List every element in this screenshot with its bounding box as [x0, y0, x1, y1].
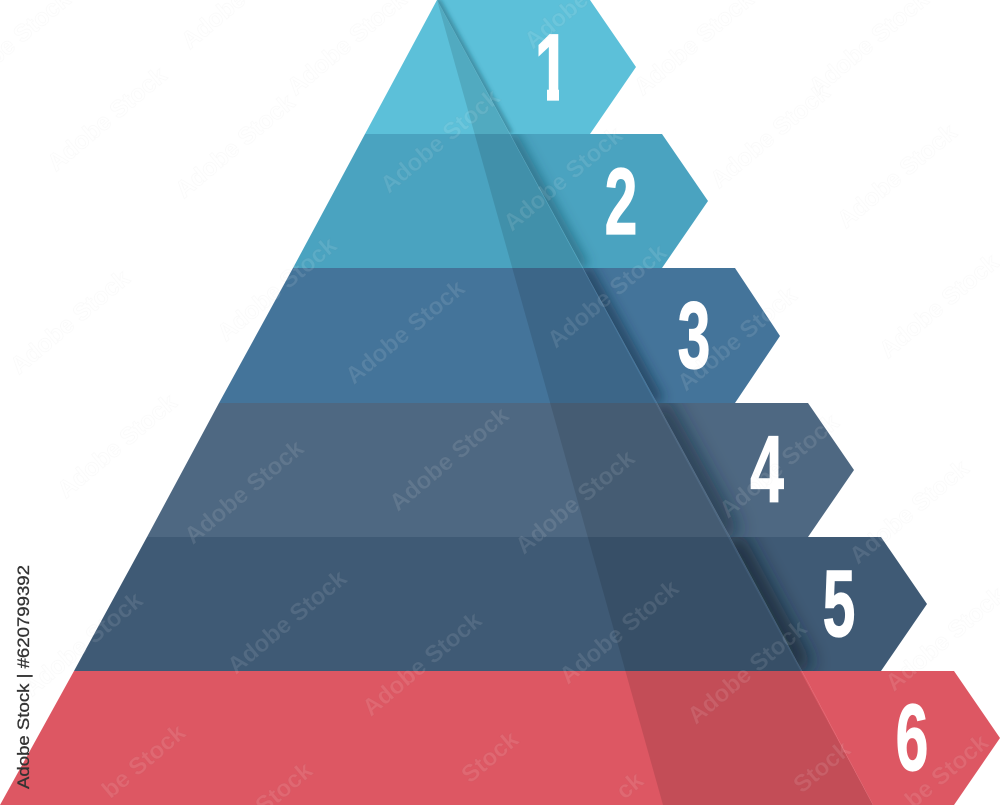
watermark pattern: Adobe Stock: [179, 434, 310, 550]
tier 4 band: [147, 403, 730, 537]
watermark pattern: ck: [611, 766, 649, 805]
tier 1 band: [365, 0, 510, 134]
watermark pattern: Adobe Stock: [42, 61, 173, 177]
number 4: 4: [750, 416, 784, 522]
tier 2 band: [293, 134, 583, 268]
watermark pattern: Adobe Stock: [340, 274, 471, 390]
stock credit text: Adobe Stock | #620799392: [14, 565, 33, 789]
arrow tab 1: [437, 0, 636, 134]
watermark pattern: Adobe Stock: [682, 614, 813, 730]
watermark pattern: Adobe Stock: [844, 454, 975, 570]
watermark pattern: Adobe Stock: [384, 401, 515, 517]
number 2: 2: [605, 147, 637, 254]
watermark pattern: Adobe Stock: [357, 606, 488, 722]
number 3: 3: [678, 281, 710, 388]
number 1: 1: [535, 15, 569, 121]
tier 5 band: [74, 537, 802, 671]
watermark pattern: Adobe Stock: [554, 574, 685, 690]
watermark pattern: Adobe Stock: [510, 444, 641, 560]
watermark pattern: Stock: [788, 735, 856, 799]
watermark pattern: Adobe Stock: [170, 88, 301, 204]
watermark pattern: Adobe Stock: [714, 408, 845, 524]
watermark pattern: Adobe Stock: [672, 281, 803, 397]
number 5: 5: [823, 549, 855, 656]
watermark pattern: Adobe Stock: [52, 388, 183, 504]
arrow tab 2: [510, 133, 708, 268]
watermark pattern: Stock: [456, 725, 524, 789]
watermark pattern: be Stock: [97, 718, 191, 804]
watermark pattern: Adobe Stock: [832, 118, 963, 234]
watermark pattern: Adobe Stock: [212, 231, 343, 347]
watermark pattern: Adobe Stock: [542, 238, 673, 354]
watermark pattern: Adobe Stock: [498, 121, 629, 237]
arrow tab 5: [730, 536, 927, 671]
arrow tab 3: [583, 267, 780, 403]
watermark pattern: Adobe Stock: [18, 586, 149, 702]
watermark pattern: Adobe Stock: [705, 78, 836, 194]
arrow tab 6: [802, 670, 1000, 805]
tier 6 band: [0, 671, 873, 805]
arrow tab 4: [657, 402, 854, 537]
fold shading: [437, 0, 873, 805]
number 6: 6: [896, 683, 928, 790]
watermark pattern: Adobe Stock: [222, 564, 353, 680]
tier 3 band: [219, 268, 657, 403]
watermark pattern: Adobe Stock: [5, 264, 136, 380]
watermark pattern: Adobe Stock: [375, 83, 506, 199]
